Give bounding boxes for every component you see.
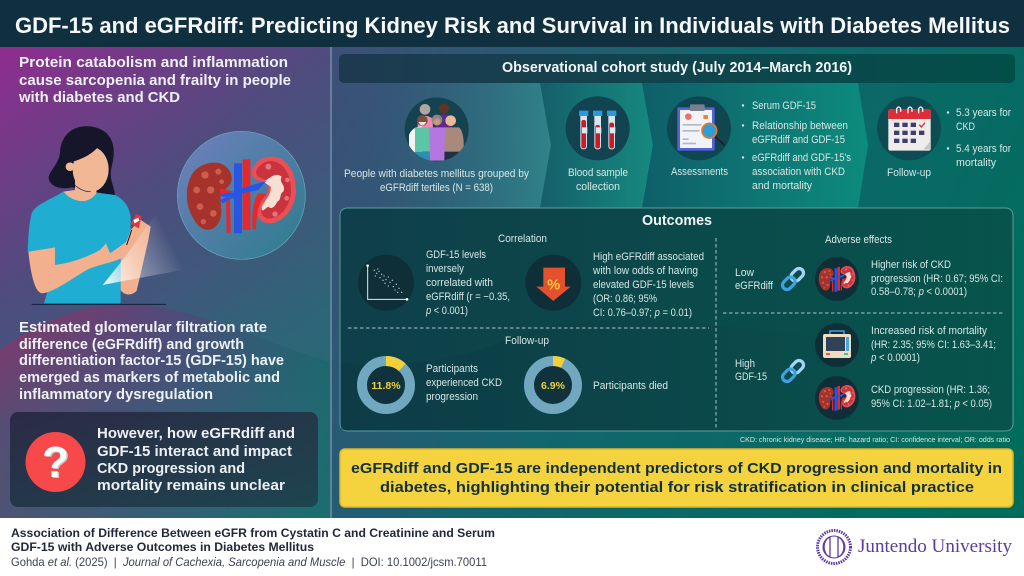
text: follow-up bullets: 5.3 years for [956, 107, 1011, 119]
text: people label: People with diabetes mellitus grouped by [344, 168, 530, 180]
chart: donut 6.9 percent [529, 361, 577, 409]
text: protein catabolism: cause sarcopenia and frailty in people [19, 73, 291, 89]
panel: background context [0, 47, 330, 518]
text: assessments bullets: eGFRdiff and GDF-15's [752, 152, 852, 164]
callout: knowledge gap [10, 412, 318, 507]
step: follow-up [877, 96, 1011, 179]
text: assessments bullets: eGFRdiff and GDF-15 [752, 134, 845, 146]
text: inverse correlation: inversely [426, 263, 465, 275]
text: inverse correlation [425, 249, 510, 317]
icon: question mark [26, 432, 86, 492]
icon: calendar [877, 96, 941, 160]
text: follow-up bullets: CKD [956, 121, 975, 133]
text: people label [344, 168, 530, 194]
text: however: mortality remains unclear [97, 478, 285, 494]
text: assessments bullets [742, 100, 852, 192]
text: protein catabolism: Protein catabolism and inflammation [19, 55, 288, 71]
step: people with diabetes [344, 97, 530, 194]
text: high GDF-15 [735, 358, 767, 383]
icon: blood tubes [566, 96, 630, 160]
text: inverse correlation: GDF-15 levels [426, 249, 487, 261]
logo: Juntendo University [818, 530, 1012, 564]
text: protein catabolism: with diabetes and CKD [18, 90, 180, 106]
text: assessments bullets: Serum GDF-15 [752, 100, 816, 112]
title bar [0, 0, 1024, 47]
text: assessments bullets: and mortality [752, 180, 813, 192]
text: eGFRdiff and GDF-15 background: inflammatory dysregulation [19, 387, 213, 403]
chart: donut 11.8 percent: 11.8% [371, 380, 401, 392]
text: high GDF-15: High [735, 358, 755, 370]
header: study design [339, 54, 1015, 83]
step: blood sample collection [566, 96, 630, 193]
icon: patient monitor [815, 323, 859, 367]
text: high GDF-15: GDF-15 [735, 371, 767, 383]
text: blood label: collection [576, 181, 620, 193]
text: follow-up bullets: mortality [956, 157, 997, 169]
footer background [0, 518, 1024, 576]
conclusion banner: diabetes, highlighting their potential for risk stratification in clinical practice [380, 479, 974, 496]
text: CKD progression participants: progression [426, 391, 478, 403]
heading: outcomes: Outcomes [642, 213, 712, 229]
text: protein catabolism [18, 55, 291, 106]
chart: donut 6.9 percent: 6.9% [541, 380, 566, 392]
icon: clipboard and magnifier [667, 96, 731, 160]
text: odds ratio: with low odds of having [592, 265, 698, 277]
text: odds ratio: CI: 0.76–0.97; p = 0.01) [593, 307, 692, 319]
text: higher risk [871, 259, 1003, 298]
icon: kidney low eGFRdiff [815, 257, 859, 301]
icon: link high [781, 359, 805, 383]
text: higher risk: Higher risk of CKD [871, 259, 951, 271]
text: follow-up bullets [947, 107, 1011, 169]
chart: donut 11.8 percent [362, 361, 410, 409]
text: eGFRdiff and GDF-15 background [19, 320, 284, 403]
icon: university seal [818, 530, 850, 564]
text: increased mortality: Increased risk of mortality [871, 325, 988, 337]
citation: GDF-15 with Adverse Outcomes in Diabetes Mellitus [11, 540, 314, 554]
text: low eGFRdiff: eGFRdiff [735, 280, 774, 292]
text: CKD progression participants: Participants [426, 363, 479, 375]
text: low eGFRdiff [735, 267, 774, 292]
text: assessments label: Assessments [671, 166, 729, 178]
text: increased mortality: (HR: 2.35; 95% CI: 1.63–3.41; [871, 339, 996, 351]
icon: down arrow percent: % [547, 278, 560, 294]
text: CKD progression participants [426, 363, 502, 403]
text: odds ratio [592, 251, 704, 319]
heading: follow-up: Follow-up [505, 335, 549, 347]
text: follow-up bullets: 5.4 years for [956, 143, 1011, 155]
text: follow-up label: Follow-up [887, 167, 931, 179]
text: inverse correlation: p < 0.001) [425, 305, 468, 317]
text: CKD progression participants: experienced CKD [426, 377, 502, 389]
step: assessments [667, 96, 852, 192]
icon: scatter plot [358, 255, 414, 311]
text: CKD progression hazard: CKD progression (HR: 1.36; [871, 384, 990, 396]
citation [11, 526, 495, 569]
text: increased mortality [870, 325, 996, 364]
text: university name: Juntendo University [858, 536, 1012, 557]
text: eGFRdiff and GDF-15 background: Estimated glomerular filtration rate [19, 320, 267, 336]
section: adverse effects [735, 234, 1003, 420]
text: assessments bullets: Relationship between [752, 120, 848, 132]
process chevrons [333, 83, 868, 208]
header: study design: Observational cohort study (July 2014–March 2016) [502, 60, 852, 76]
text: people label: eGFRdiff tertiles (N = 638) [380, 182, 493, 194]
text: participants died: Participants died [593, 380, 668, 392]
icon: link low [781, 267, 805, 291]
icon: question mark: ? [44, 439, 70, 488]
text: however: GDF-15 interact and impact [97, 444, 292, 460]
text: inverse correlation: eGFRdiff (r = −0.35, [426, 291, 510, 303]
text: however: However, how eGFRdiff and [97, 426, 295, 442]
text: increased mortality: p < 0.0001) [870, 352, 920, 364]
text: low eGFRdiff: Low [735, 267, 754, 279]
heading: correlation: Correlation [498, 233, 547, 245]
text: blood label: Blood sample [568, 167, 628, 179]
text: assessments bullets: association with CKD [752, 166, 845, 178]
text: odds ratio: elevated GDF-15 levels [593, 279, 695, 291]
panel: outcomes [340, 208, 1013, 431]
illustration: woman testing blood glucose [28, 126, 217, 304]
conclusion banner [340, 449, 1013, 507]
heading: adverse effects: Adverse effects [825, 234, 893, 246]
text: however: CKD progression and [97, 461, 245, 477]
text: odds ratio: High eGFRdiff associated [593, 251, 704, 263]
footnote: abbreviations: CKD: chronic kidney disease; HR: hazard ratio; CI: confidence interval; OR: odds ratio [740, 437, 1010, 444]
text: CKD progression hazard: 95% CI: 1.02–1.81; p < 0.05) [871, 398, 992, 410]
section: correlation [358, 233, 704, 319]
illustration: kidneys in circle [177, 131, 305, 259]
icon: kidney high GDF-15 [815, 376, 859, 420]
citation: Gohda et al. (2025) | Journal of Cachexia, Sarcopenia and Muscle | DOI: 10.1002/jcsm.70011 [11, 555, 487, 569]
icon: group of people [405, 97, 469, 162]
text: odds ratio: (OR: 0.86; 95% [593, 293, 657, 305]
conclusion banner: eGFRdiff and GDF-15 are independent predictors of CKD progression and mortality in [351, 460, 1002, 477]
text: eGFRdiff and GDF-15 background: emerged as markers of metabolic and [19, 370, 280, 386]
text: higher risk: 0.58–0.78; p < 0.0001) [871, 286, 967, 298]
text: CKD progression hazard [871, 384, 992, 410]
text: higher risk: progression (HR: 0.67; 95% CI: [871, 273, 1003, 285]
icon: down arrow percent [525, 255, 581, 311]
section: follow-up results [362, 335, 668, 409]
title bar: GDF-15 and eGFRdiff: Predicting Kidney Risk and Survival in Individuals with Diabetes Mellitus [15, 13, 1010, 38]
text: blood label [568, 167, 628, 193]
text: eGFRdiff and GDF-15 background: differentiation factor-15 (GDF-15) have [19, 353, 284, 369]
text: however [97, 426, 295, 494]
icon: question mark: ? [42, 438, 69, 487]
citation: Association of Difference Between eGFR from Cystatin C and Creatinine and Serum [11, 526, 495, 540]
text: eGFRdiff and GDF-15 background: difference (eGFRdiff) and growth [19, 337, 244, 353]
text: inverse correlation: correlated with [426, 277, 493, 289]
